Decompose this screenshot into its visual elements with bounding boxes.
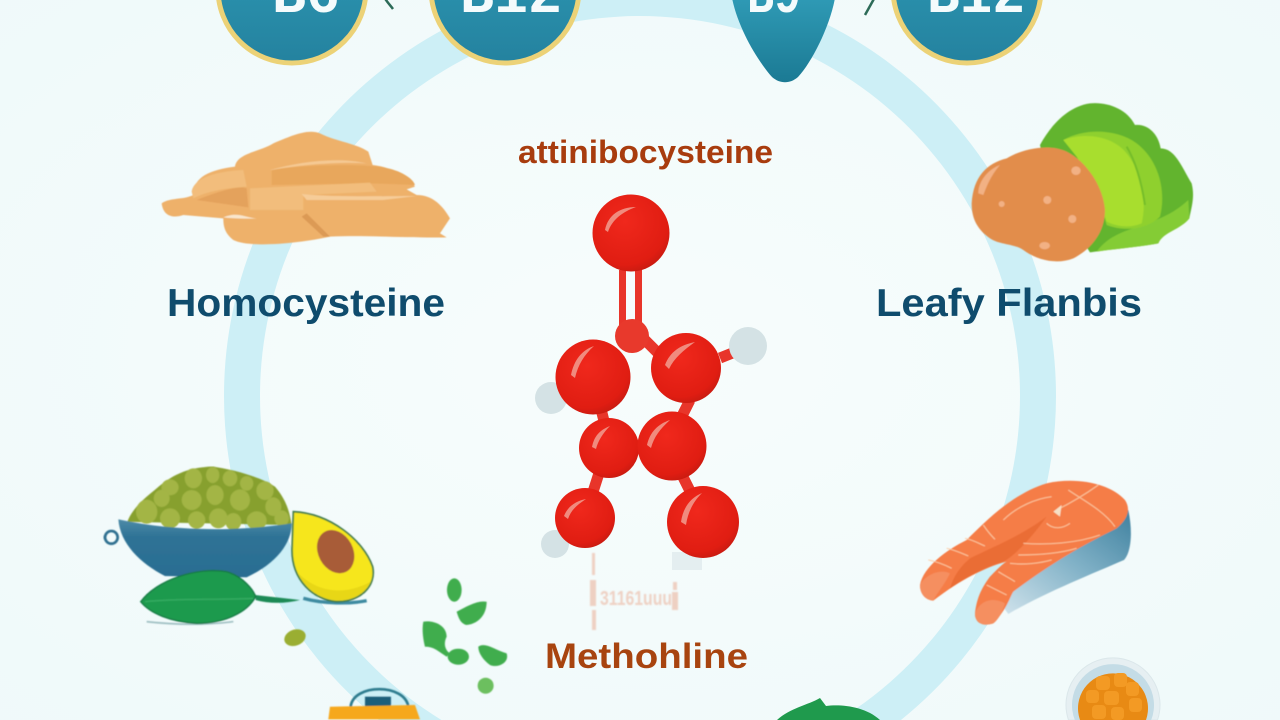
icon: dish of orange pieces [1066,658,1160,720]
badge: B12 [431,0,579,63]
oxygen atom top [592,194,670,272]
atom right [651,333,721,403]
cycle ring [224,0,1056,720]
heading: attinibocysteine: attinibocysteine [518,134,773,170]
faded label under molecule [590,553,678,630]
badge: B6 [218,0,366,63]
salmon skin side [993,510,1131,614]
leaf [141,571,300,624]
herb leaves [423,578,507,694]
arrow: B6 to B12 [384,0,393,9]
icon: pea bowl, leaf and avocado [105,467,507,719]
bowl handle [105,531,118,544]
icon: cabbage and potato [972,103,1193,261]
molecule [535,194,767,570]
avocado [292,512,373,603]
peas [136,467,289,530]
yellow bag [328,689,420,719]
centre atom [615,319,649,353]
salmon fat lines [928,485,1115,595]
atom lower right [638,412,706,480]
heading: Methohline: Methohline [545,637,748,676]
icon: green leaf bottom [777,698,880,720]
icon: salmon steak [920,481,1131,625]
molecule bonds [592,270,735,495]
vitamin badges row [218,0,1041,82]
bowl [118,519,292,577]
heading: Homocysteine: Homocysteine [167,282,445,325]
salmon flesh [920,481,1128,625]
atom bottom left [555,488,615,548]
atom left [556,340,630,414]
badge: folate drop [732,0,835,82]
icon: grain strips [162,132,450,244]
atom bottom right [667,486,739,558]
pea pile [118,467,292,525]
atom lower left [579,418,639,478]
badge: B12 right [893,0,1041,63]
faded label under molecule: 31161uuu [600,588,672,610]
stray pea [282,626,308,649]
arrow: folate to B12 [865,0,875,15]
hydrogen atoms [535,327,767,570]
heading: Leafy Flanbis: Leafy Flanbis [876,282,1142,325]
